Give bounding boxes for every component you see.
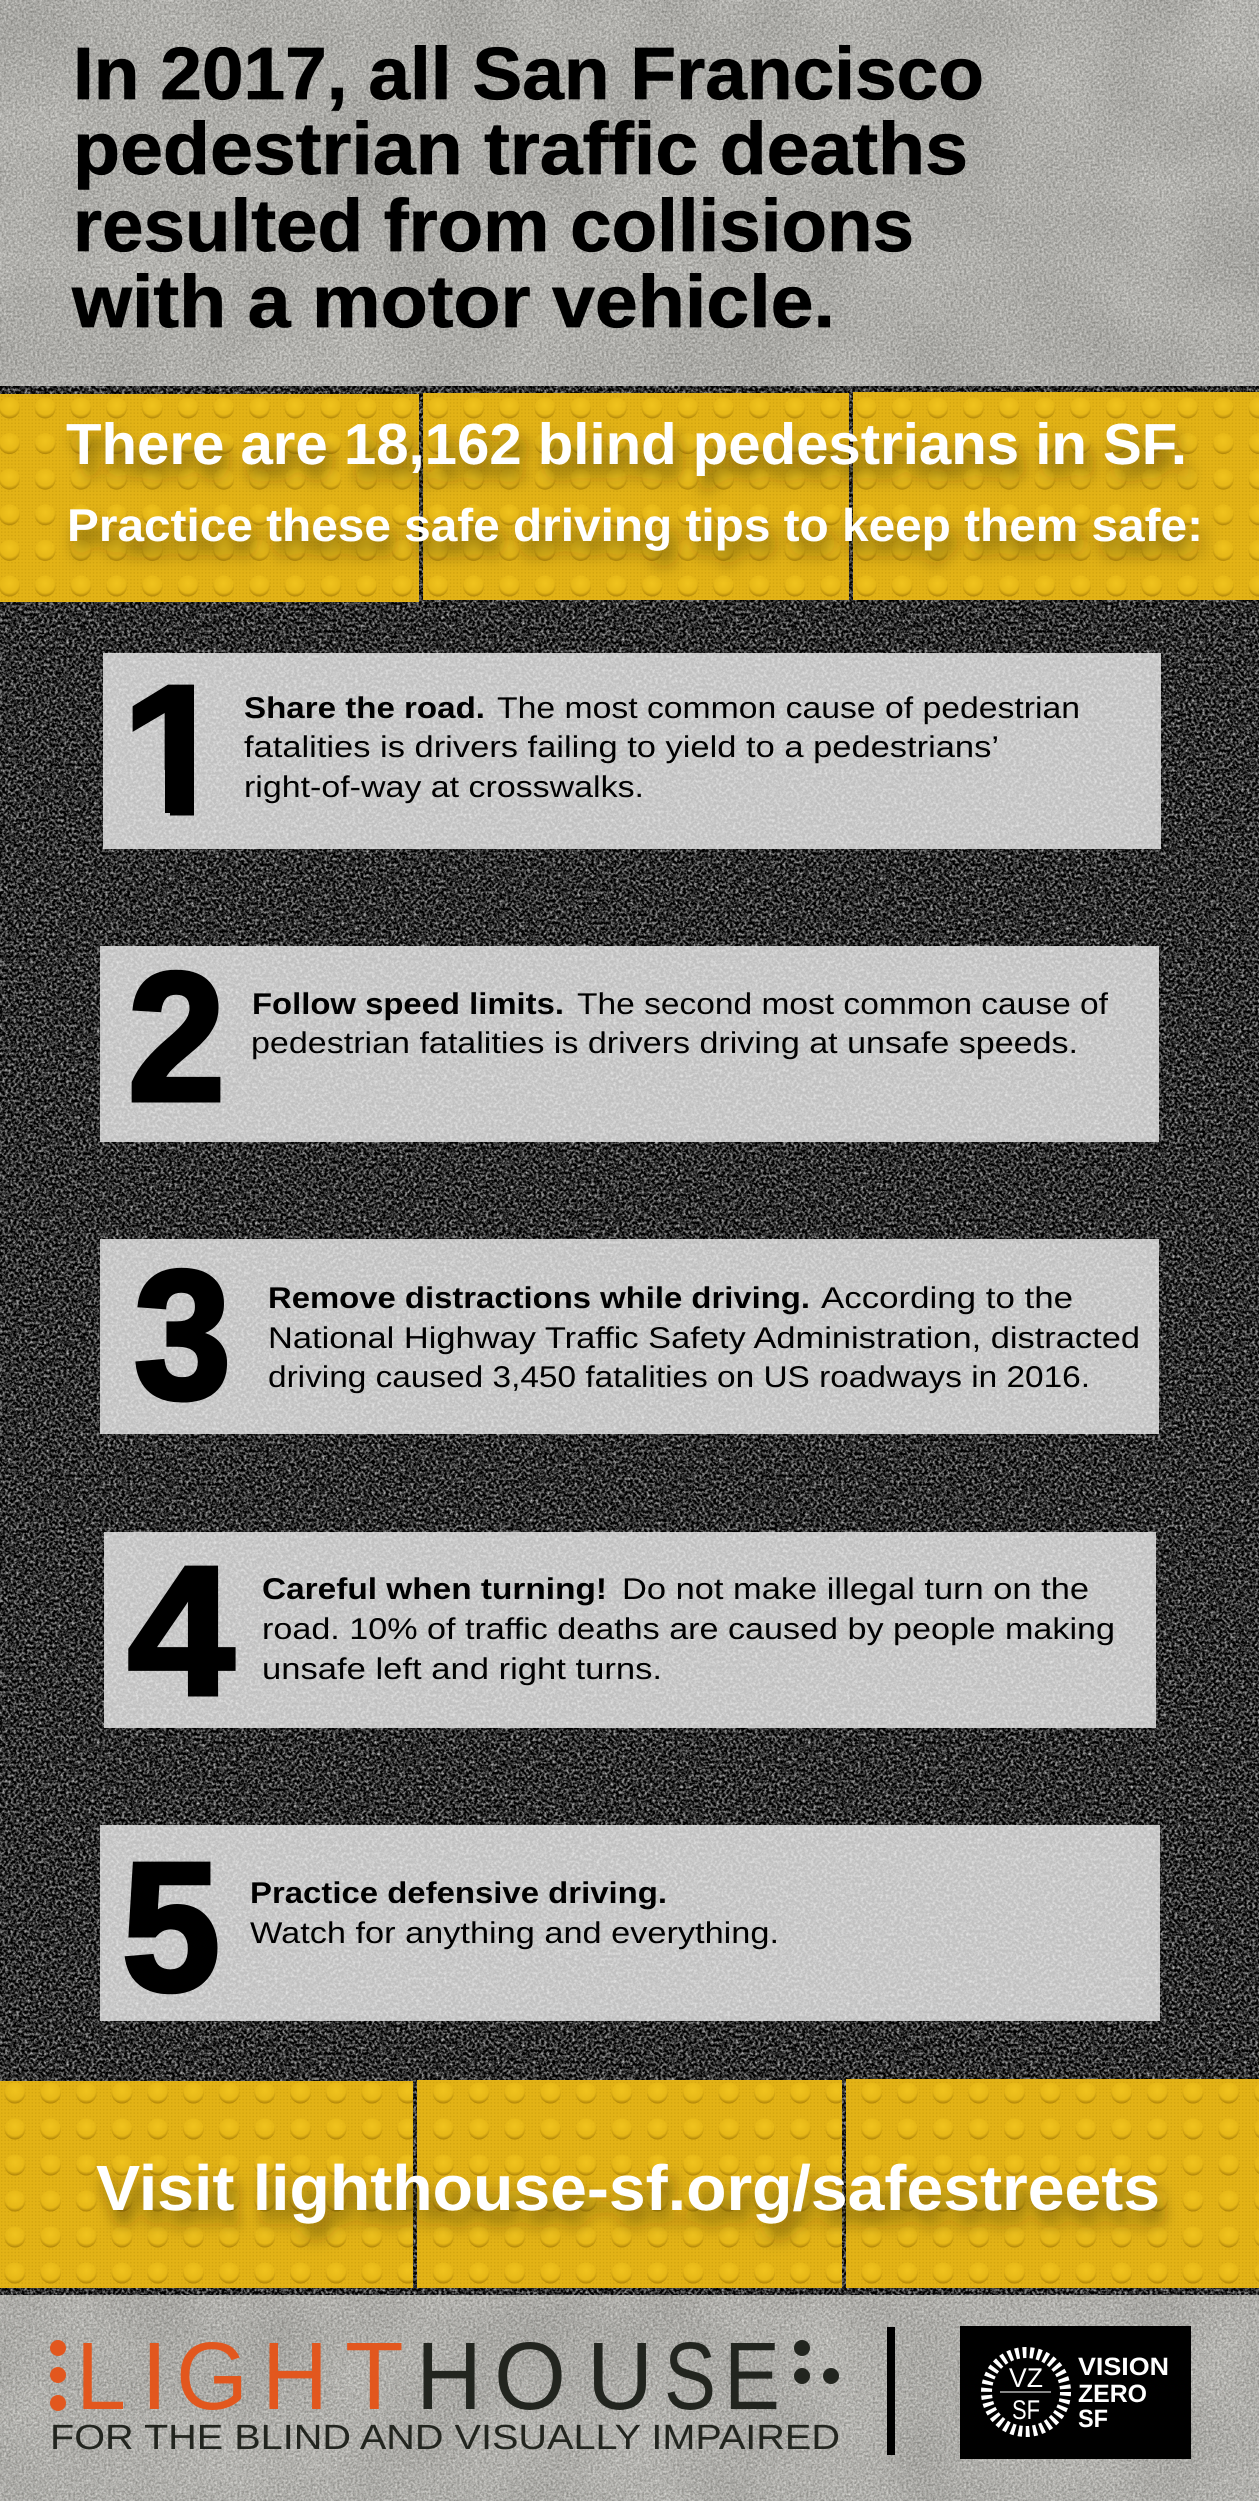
wordmark HOUSE: H bbox=[416, 2323, 482, 2430]
wordmark bbox=[1078, 2353, 1169, 2433]
wordmark LIGHT: G bbox=[176, 2323, 248, 2430]
tip 4 text: Do not make illegal turn on the bbox=[622, 1573, 1089, 1606]
icon: dashed ring bbox=[986, 2352, 1066, 2432]
tip 3 text: According to the bbox=[821, 1282, 1073, 1315]
wordmark LIGHT bbox=[76, 2323, 404, 2430]
wordmark HOUSE: O bbox=[494, 2323, 566, 2430]
tip 5 text: Practice defensive driving. bbox=[250, 1877, 667, 1910]
banner heading: Practice these safe driving tips to keep them safe: bbox=[67, 499, 1203, 551]
panel: tip 4 bbox=[104, 1528, 1156, 1733]
banner heading bbox=[66, 412, 1203, 551]
tip 4 text bbox=[262, 1573, 1115, 1686]
orange braille dots bbox=[50, 2340, 66, 2411]
title: with a motor vehicle. bbox=[71, 260, 835, 343]
title bbox=[71, 32, 984, 343]
wordmark: SF bbox=[1078, 2405, 1108, 2433]
concrete sidewalk bottom bbox=[0, 2295, 1259, 2501]
website call to action: Visit lighthouse-sf.org/safestreets bbox=[96, 2152, 1160, 2224]
tip 1 text: fatalities is drivers failing to yield to a pedestrians’ bbox=[244, 731, 999, 764]
tip 5 text: Watch for anything and everything. bbox=[250, 1917, 779, 1950]
tagline: FOR THE BLIND AND VISUALLY IMPAIRED bbox=[50, 2418, 840, 2457]
divider bbox=[887, 2327, 895, 2455]
panel: tip 5 bbox=[100, 1824, 1160, 2029]
tip 4 text: unsafe left and right turns. bbox=[262, 1653, 662, 1686]
wordmark LIGHT: I bbox=[141, 2323, 168, 2430]
tip 3 text bbox=[268, 1282, 1140, 1394]
title: pedestrian traffic deaths bbox=[73, 107, 968, 190]
concrete sidewalk top bbox=[0, 0, 1259, 386]
wordmark: VISION bbox=[1078, 2353, 1169, 2381]
tip 3 text: Remove distractions while driving. bbox=[268, 1282, 810, 1315]
asphalt road background bbox=[0, 386, 1259, 2295]
tip 2 text bbox=[251, 988, 1109, 1060]
dark braille dots bbox=[794, 2340, 839, 2384]
number 5: 5 bbox=[122, 1824, 220, 2029]
title: In 2017, all San Francisco bbox=[73, 32, 984, 115]
tip 3 text: National Highway Traffic Safety Administration, distracted bbox=[268, 1322, 1140, 1355]
number 1: 1 bbox=[122, 647, 230, 852]
wordmark HOUSE: U bbox=[587, 2323, 653, 2430]
wordmark HOUSE bbox=[416, 2323, 780, 2430]
title: resulted from collisions bbox=[73, 184, 914, 267]
ring divider and letters: VZ bbox=[1009, 2363, 1043, 2393]
logo: Vision Zero SF bbox=[960, 2326, 1191, 2459]
logo: LightHouse for the Blind and Visually Impaired bbox=[50, 2323, 840, 2457]
number 3: 3 bbox=[134, 1232, 231, 1437]
panel: yellow tactile paving banner top bbox=[0, 392, 1259, 602]
panel: tip 3 bbox=[100, 1232, 1159, 1437]
tip 3 text: driving caused 3,450 fatalities on US roadways in 2016. bbox=[268, 1361, 1090, 1394]
tip 2 text: The second most common cause of bbox=[577, 988, 1109, 1021]
tip 1 text bbox=[244, 692, 1080, 804]
tip 1 text: The most common cause of pedestrian bbox=[497, 692, 1080, 725]
wordmark LIGHT: H bbox=[262, 2323, 328, 2430]
tip 5 text bbox=[250, 1877, 779, 1950]
tip 2 text: pedestrian fatalities is drivers driving at unsafe speeds. bbox=[251, 1027, 1078, 1060]
wordmark: ZERO bbox=[1078, 2380, 1147, 2408]
panel: tip 1 bbox=[103, 647, 1161, 852]
wordmark LIGHT: T bbox=[345, 2323, 404, 2430]
number 1 bbox=[132, 684, 194, 816]
panel: yellow tactile paving banner bottom bbox=[0, 2079, 1259, 2288]
tip 1 text: Share the road. bbox=[244, 692, 485, 725]
ring divider and letters: SF bbox=[1012, 2395, 1040, 2425]
wordmark HOUSE: E bbox=[724, 2323, 780, 2430]
tip 1 text: right-of-way at crosswalks. bbox=[244, 771, 644, 804]
panel: tip 2 bbox=[100, 934, 1159, 1142]
number 4: 4 bbox=[128, 1528, 234, 1733]
ring divider and letters bbox=[1000, 2363, 1051, 2425]
number 2: 2 bbox=[128, 934, 225, 1139]
wordmark HOUSE: S bbox=[664, 2323, 716, 2430]
tip 4 text: Careful when turning! bbox=[262, 1573, 607, 1606]
banner heading: There are 18,162 blind pedestrians in SF. bbox=[66, 412, 1187, 477]
wordmark LIGHT: L bbox=[76, 2323, 126, 2430]
tip 4 text: road. 10% of traffic deaths are caused by people making bbox=[262, 1613, 1115, 1646]
tip 2 text: Follow speed limits. bbox=[252, 988, 564, 1021]
